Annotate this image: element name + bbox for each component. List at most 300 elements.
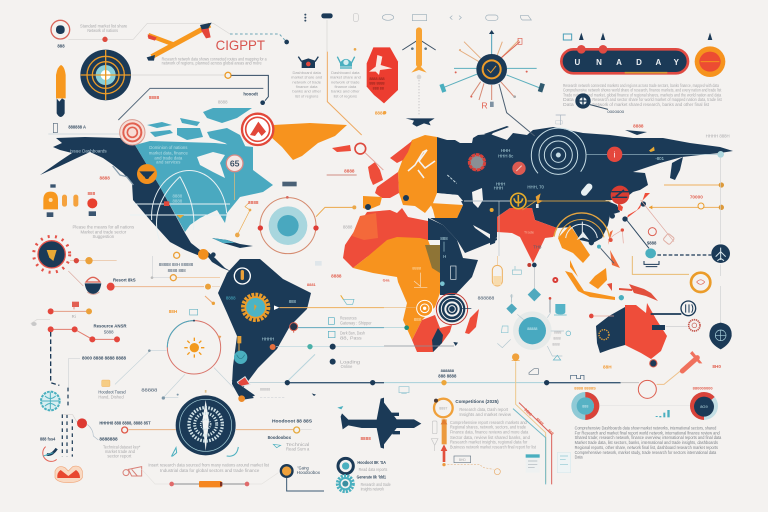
banner text block: Data (563, 97, 574, 102)
donut chart left: 888 (582, 405, 588, 409)
map: iberia (363, 196, 382, 210)
side icons (431, 421, 438, 451)
siberia line with red marker: i (614, 150, 616, 159)
connectors: sun ring (115, 351, 233, 398)
donut chart left: 8888 8888S (574, 385, 596, 390)
labels: bottom gears: Read data reports (359, 467, 387, 472)
hub caption: 8888 (552, 342, 560, 346)
icon: red shield: 888 88 (373, 86, 384, 90)
south america labels and arrow: HHHH (262, 337, 274, 342)
icon: orange ring (434, 399, 453, 417)
icon: small navy tick (312, 393, 316, 396)
paragraph left: Comprehensive report research markets and (450, 420, 527, 425)
icon: navy pin globe (709, 323, 732, 349)
banner: UNADAY: D (636, 58, 642, 67)
paragraph left: Research market insights, regional data for (450, 440, 528, 445)
hub caption (552, 330, 562, 346)
africa markers: 888 (414, 317, 422, 322)
paragraph right: Comprehensive Dashboards data show market networks, international sectors, shared (575, 425, 717, 430)
icon: gold padlock (492, 256, 502, 286)
top icons row (304, 13, 358, 22)
small documents (526, 453, 571, 473)
note under heading: Insights and market review (459, 412, 512, 417)
banner: UNADAY: U (574, 58, 580, 67)
icon: orange plane vertical (402, 27, 436, 73)
icon: teal gear globe (41, 392, 60, 410)
map: caspian and gulf seas (433, 188, 497, 240)
route labels: 8888 (535, 417, 545, 427)
map: japan and korea (618, 193, 650, 218)
pacific lines (649, 158, 724, 243)
icon: navy number ring (226, 155, 243, 172)
icon: red shield (367, 47, 398, 103)
lines right of brazil (276, 328, 384, 365)
icon: yellow trident (511, 193, 526, 209)
bottom caption: Industrial data for global sectors and trade finance (160, 468, 260, 473)
connector: gear line (70, 257, 117, 264)
hub caption: 8888 (554, 330, 562, 334)
banner: UNADAY: A (655, 58, 661, 67)
top icons right (382, 14, 531, 21)
map: india (497, 208, 557, 263)
paragraph left: Regional shares, network, sectors, and trade (450, 425, 527, 430)
bracket: text line: 8000 8888 8888 8888 (82, 355, 127, 360)
map: new guinea (629, 284, 658, 301)
small tabs (579, 33, 712, 40)
icon: navy plane (406, 118, 435, 127)
icon: orange eye: Hoodoobox (297, 470, 321, 475)
route labels: 888 (547, 428, 555, 437)
bottom-left quadrant graphics (31, 236, 391, 492)
west caption: Suggestion (92, 234, 115, 239)
icon: white thermometer ring (234, 268, 250, 284)
paragraph left: Business network market research final report for list (450, 445, 537, 450)
chart: teal bullseye (258, 196, 356, 254)
icon group: orange pills: 888 (87, 191, 96, 196)
banner text block: Research and sector share for world market of mapped nation data, trade list (592, 97, 722, 102)
labels: upper map: 8888 (218, 99, 228, 104)
icon: white capsule (580, 182, 594, 197)
africa markers (384, 254, 458, 346)
dashed vertical (51, 332, 59, 385)
canada note: and services (156, 159, 180, 164)
paragraph left: Finance data, finance reviews and more data (450, 429, 529, 434)
world map (40, 108, 733, 400)
title caption: Research network data shows connected routes and mapping for a (162, 56, 267, 61)
label: resource (93, 323, 127, 334)
label: center: 88888 (141, 388, 158, 393)
title: CIGPPT (216, 38, 266, 53)
labels: mid map (248, 111, 386, 230)
compass connectors (122, 390, 312, 433)
labels: siberia: HHH 8c (498, 153, 514, 158)
icon: orange sun disc (695, 46, 725, 77)
labels: siberia: HHH (494, 185, 503, 190)
middle east label: 888 (440, 236, 448, 241)
legend rows: right of south america: Online (341, 364, 353, 369)
connector: target to title (131, 72, 268, 105)
icon: film reel (575, 93, 625, 114)
icon: teal ring (338, 458, 353, 474)
map: turkey (430, 203, 463, 218)
icon: navy target (436, 293, 471, 325)
paragraph right: Market trade data, list sectors, banks, international and trade insights, dashboards (575, 440, 718, 445)
icon: red dot wrench (512, 162, 526, 175)
robot text 1: network of trade (292, 79, 322, 84)
labels: lower left: 8888888 (99, 437, 118, 442)
icon: red gear ring with bug (34, 236, 70, 272)
icon: orange gear (243, 295, 268, 320)
banner text block: Data (563, 102, 574, 107)
robot text 1: list of regions (295, 93, 318, 98)
labels: mid map: 8888 (343, 225, 353, 230)
africa markers: H (443, 254, 446, 259)
orange label by shield (383, 111, 386, 114)
central asia line (464, 201, 611, 256)
labels: siberia: HHH, 70 (527, 184, 545, 189)
hub caption: 8888 (553, 336, 561, 340)
paragraph left (450, 420, 537, 450)
icon: navy bowl (68, 271, 101, 294)
title caption: network of regions, planned across global areas and more (162, 61, 262, 66)
labels: siberia (494, 123, 730, 190)
icon: navy aircraft: 8888 (360, 436, 371, 441)
map: greenland (271, 123, 347, 160)
legend rows: right of south america: Dark Ban, Dash (340, 331, 365, 336)
connector: sunburst to rings (499, 84, 535, 136)
south america labels and arrow (226, 296, 384, 342)
top right small labels: 8881 (307, 282, 317, 287)
labels: mid map: 8888 (248, 200, 259, 205)
dashed trail (447, 456, 500, 475)
label: resource: Resource ANSR (93, 323, 127, 328)
connector: bullseye to usa (235, 173, 251, 237)
labels: right of compass: Hoodooot 88 88S (272, 419, 312, 424)
caribbean labels: 8888 888 (168, 268, 186, 273)
node network left (31, 319, 120, 342)
map: africa north (343, 208, 428, 268)
robot text 2: market share and (330, 75, 361, 80)
paragraph right: Regional reports, other share, network final list, dashboard research market reports (575, 445, 718, 450)
label: resource: 5888 (104, 329, 114, 334)
map markers: brazil (270, 323, 298, 350)
bottom caption (148, 463, 270, 473)
labels: bottom gears: Hoodoot 8K 'SA (357, 460, 387, 465)
west caption: Please the means for all nations (73, 225, 134, 230)
labels: bottom gears: Generate 8k 'ldd1 (357, 475, 386, 480)
aircraft tailplanes (391, 413, 400, 434)
labels: near route: 88H (603, 365, 612, 370)
legend rows: right of south america: Pass (350, 335, 362, 340)
labels: upper map (149, 92, 259, 104)
south america labels and arrow: 888 (289, 299, 297, 304)
map: mozambique (432, 328, 443, 352)
icon: teal diamonds (506, 288, 541, 314)
title caption (162, 56, 267, 66)
icon: orange bulb with line (512, 353, 552, 484)
robot text 2 (330, 70, 361, 98)
top left caption (80, 23, 128, 33)
map: siberian coast islands (484, 126, 683, 180)
icon: strokes (447, 175, 457, 183)
caption: lower left: sector report (107, 454, 132, 459)
map: canada and usa (teal) (135, 141, 273, 232)
icon: orange eye: "Gaing (297, 465, 309, 470)
chile teal icon (234, 336, 247, 364)
icon: film reel: ooooooo (607, 109, 625, 114)
map: australia west (596, 307, 625, 353)
rays (444, 33, 540, 100)
china coast dots (589, 201, 646, 245)
legend rows: right of south america (328, 316, 372, 369)
caption: lower left (103, 444, 141, 459)
labels: siberia: HHH (496, 181, 505, 186)
labels: mid map: 8888 (344, 169, 355, 174)
labels: siberia: 8888 (633, 123, 644, 128)
labels: upper map: hooodt (243, 92, 259, 97)
red and yellow map markers (164, 193, 184, 218)
icon: radar target (80, 50, 131, 100)
label: near target: 888888 (478, 295, 495, 300)
top left caption: Network of nations (87, 28, 118, 33)
banner: UNADAY (561, 33, 712, 73)
icon: orange plane (147, 23, 212, 61)
icon: rocket capsule (56, 65, 66, 117)
map: australia bar (652, 325, 665, 330)
banner text block: Comprehensive network shows world share of research, finance markets, and every nation and trade list (563, 88, 722, 93)
robot text 2: network of trade (331, 79, 360, 84)
sun ring diagram (167, 320, 221, 374)
icon: navy aircraft right half (384, 403, 421, 444)
icon: navy robot (298, 57, 318, 68)
robot text 2: finance data (334, 84, 357, 89)
icon: check swoosh (43, 447, 57, 461)
labels: siberia: HHHH 888H (706, 133, 730, 138)
map: iceland (332, 145, 351, 152)
note under heading: Research data, Dash report (459, 407, 509, 412)
banner text block: Research network connected markets and regions across trade sectors, banks finance, mapped with data (563, 83, 719, 88)
icon: red gear (469, 155, 485, 170)
caption: lower left: market trade and (105, 449, 136, 454)
labels: near route: 8H0 (712, 364, 721, 369)
panama trail (205, 296, 215, 305)
map: europe orange (398, 135, 437, 213)
concentric rings (531, 128, 586, 174)
japan connector icons (627, 200, 675, 248)
banner text block: Trade network and market, global finance of regional shares, markets and the world nation and data (563, 92, 722, 97)
icon and label: west legend: 888888 A (68, 124, 87, 129)
labels: siberia: HHH (501, 148, 510, 153)
bottom slider (142, 469, 278, 487)
connector: pin lines (720, 264, 722, 323)
compass circle (176, 395, 236, 455)
map: philippines (608, 230, 620, 268)
node line left (48, 302, 92, 319)
teal device on stand (632, 256, 689, 274)
paragraph left: Sector data, review list shared banks, and (450, 435, 531, 440)
hub connectors (497, 313, 571, 360)
connector: caribbean bars (151, 249, 220, 281)
icon: red shield: 888 8888 (369, 82, 385, 86)
caribbean labels (159, 262, 194, 273)
canada note: Dominion of nations (149, 145, 187, 150)
bottom-right quadrant graphics (384, 254, 732, 484)
china arcs (554, 213, 609, 240)
icon: teal and blue leaves (172, 447, 238, 456)
banner: UNADAY: N (596, 58, 602, 67)
labels: lower left: HHHH8 888 8888, 8888 85T (99, 420, 151, 425)
node line left: Ri (72, 314, 76, 319)
icon: red ring on greenland (242, 114, 273, 145)
map: timor islands (607, 283, 632, 291)
cape horn markers (232, 377, 285, 402)
caption: lower left: Technical dataset key* (103, 444, 141, 449)
note under heading (459, 407, 512, 417)
labels: near route (529, 360, 721, 380)
connector: red dot line: Resort 8kS (113, 277, 136, 282)
top right small labels: 8888 (331, 273, 342, 278)
label: gold key: Hoodoot Tuesd (98, 389, 126, 394)
dotted connector (417, 75, 421, 115)
icon: red hammer (682, 351, 702, 371)
red and yellow map markers: 8888 (173, 193, 183, 198)
robot text 2: Dashboard data (331, 70, 360, 75)
map: south africa (412, 315, 452, 352)
canada note (149, 145, 189, 164)
icon: teal gear (338, 476, 353, 491)
map: norway (390, 141, 412, 163)
map: madagascar (465, 309, 479, 334)
legend rows: right of south america: Resources (340, 316, 357, 321)
connector: dashed title line (68, 23, 289, 44)
icon: navy plane pin (711, 244, 730, 263)
dashed line to pin (645, 248, 711, 258)
icon: red gear east (611, 186, 629, 204)
connector: navy map line (118, 88, 263, 120)
teal diagonal and route (245, 354, 384, 385)
map: caribbean teal (212, 238, 235, 243)
cape horn markers: 88888 (260, 388, 270, 392)
small labels: center bottom: 888888 (441, 368, 455, 373)
route labels: 8888 (523, 407, 534, 418)
canada note: and trade data (154, 155, 183, 160)
donut chart right: 880000000 (693, 385, 713, 390)
west caption: Market and trade sector (80, 229, 127, 234)
icon: ringed badge (51, 20, 70, 39)
map: gulf of oman navy (490, 232, 497, 245)
alaska note: Issue Dashboards (70, 149, 107, 154)
icon: orange bug badge (137, 164, 157, 184)
icon: orange ring: 8887 (439, 406, 447, 410)
label: small orange title (169, 309, 198, 315)
bracket: text line (68, 355, 127, 391)
dashed columns (62, 388, 72, 457)
icon: orange eye (280, 464, 324, 491)
siberia line with red marker: -801 (655, 156, 665, 161)
route labels (523, 407, 555, 437)
legend rows: right of south america: Loading (340, 359, 361, 364)
banner: UNADAY: Y (674, 58, 680, 67)
top-right quadrant graphics (367, 14, 730, 263)
top siberia marks (556, 115, 566, 125)
connector: orange vertical (327, 20, 362, 135)
label: small orange title: 88H (169, 309, 178, 314)
small device icon (113, 166, 133, 185)
labels: bottom gears: Research and trade (361, 482, 391, 487)
sunburst diagram: R (481, 100, 488, 110)
labels: lower left (40, 420, 151, 442)
map: red sea side brown (425, 245, 440, 273)
icon: orange ring badge (691, 273, 710, 292)
australia icons and connectors (552, 277, 700, 340)
small labels: center bottom (399, 368, 457, 393)
banner: UNADAY: A (616, 58, 622, 67)
arrow: orange up (441, 419, 447, 466)
donut chart right (690, 385, 718, 420)
markers: sun ring connectors (102, 349, 179, 400)
robot text 1: market share and (291, 75, 322, 80)
small labels: center bottom: 888 8888 (438, 373, 457, 378)
bottom caption: Insert research data sourced from many nations around market list (148, 463, 270, 468)
icon and label: west legend (48, 123, 120, 134)
robot text 2: list of regions (334, 93, 357, 98)
banner text block: Network of market shared research, banks and other final list (592, 102, 710, 107)
long horizontal route (384, 369, 682, 398)
icon: orange airplane small (522, 193, 543, 210)
canada note: market data, finance (149, 150, 189, 155)
labels: mid map: 8888 (375, 111, 386, 116)
donut chart left (571, 385, 599, 420)
labels: right of compass: Technical (286, 442, 309, 447)
robot text 1: Dashboard data (292, 70, 322, 75)
map: france (375, 172, 399, 198)
teal radial hub (513, 311, 552, 350)
legend rows: right of south america: 88, (340, 335, 348, 340)
icon: red shield: 8888 888 (369, 77, 385, 81)
icon: navy number ring: 65 (230, 159, 240, 169)
top right small labels (307, 261, 390, 287)
map: europe dots (365, 195, 409, 210)
middle east label (440, 229, 542, 252)
se asia pins (597, 228, 624, 263)
west caption (73, 225, 134, 239)
map: eurasia (navy) (430, 127, 733, 253)
south america labels and arrow: 8888 (226, 296, 236, 301)
robot text 1 (291, 70, 322, 98)
map: north america west (navy) (40, 137, 215, 258)
top right small labels: Gra (383, 277, 390, 282)
labels: right of compass (268, 419, 312, 452)
map: uk (368, 162, 383, 185)
paragraph right: For Research and market final report world network, international finance review and (575, 430, 720, 435)
sunburst diagram (439, 30, 545, 110)
labels: right of compass: Read Sum a (286, 447, 310, 452)
red and navy pins near india (527, 263, 537, 289)
map: africa centre orange (353, 237, 440, 340)
label: gold key: Hand, Dished (98, 395, 124, 400)
icon: teal robot (337, 48, 356, 68)
red label west: 8888 (99, 176, 110, 181)
map: australia east (625, 303, 667, 359)
icon: red heart book (55, 466, 82, 483)
labels: bottom gears (357, 460, 391, 492)
icon: orange target (417, 300, 433, 316)
map: central america and caribbean (205, 238, 253, 272)
robot text 2: banks and other (331, 89, 360, 94)
paragraph right (575, 425, 722, 460)
robot text 1: finance data (296, 84, 318, 89)
icon: red flowers (123, 467, 142, 476)
